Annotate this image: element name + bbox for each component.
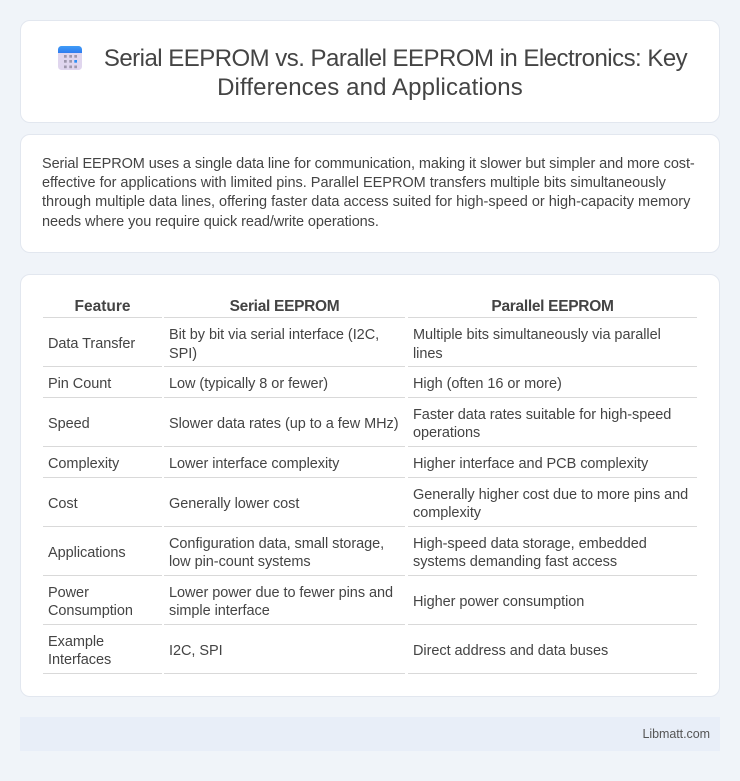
title: Differences and Applications xyxy=(217,74,523,101)
summary text: through multiple data lines, offering faster data access suited for high-speed or high-capacity memory xyxy=(42,194,690,210)
comparison table: lines xyxy=(413,346,443,362)
comparison table: Slower data rates (up to a few MHz) xyxy=(169,416,399,432)
comparison table: Generally higher cost due to more pins and xyxy=(413,487,688,503)
comparison table: Bit by bit via serial interface (I2C, xyxy=(169,327,379,343)
comparison table: Higher power consumption xyxy=(413,594,584,610)
title xyxy=(104,45,688,101)
footer credit: Libmatt.com xyxy=(642,727,710,741)
footer bar xyxy=(20,717,720,751)
comparison table: Low (typically 8 or fewer) xyxy=(169,376,328,392)
comparison table: Example xyxy=(48,634,104,650)
comparison table: Power xyxy=(48,585,89,601)
comparison table: Consumption xyxy=(48,603,133,619)
comparison table: Data Transfer xyxy=(48,336,135,352)
comparison table: Generally lower cost xyxy=(169,496,299,512)
summary text: Serial EEPROM uses a single data line for communication, making it slower but simpler and more cost- xyxy=(42,156,695,172)
comparison table: systems demanding fast access xyxy=(413,554,617,570)
comparison table: operations xyxy=(413,425,480,441)
comparison table: low pin-count systems xyxy=(169,554,311,570)
summary text: effective for applications with limited pins. Parallel EEPROM transfers multiple bits simultaneously xyxy=(42,175,666,191)
title: Serial EEPROM vs. Parallel EEPROM in Electronics: Key xyxy=(104,45,687,72)
panel: summary card xyxy=(20,134,720,253)
panel: title card xyxy=(20,20,720,123)
comparison table: complexity xyxy=(413,505,481,521)
comparison table: Pin Count xyxy=(48,376,111,392)
icon: calendar grid xyxy=(58,46,82,70)
comparison table: Multiple bits simultaneously via parallel xyxy=(413,327,661,343)
comparison table: Cost xyxy=(48,496,78,512)
comparison table: Complexity xyxy=(48,456,119,472)
comparison table: High (often 16 or more) xyxy=(413,376,562,392)
comparison table: I2C, SPI xyxy=(169,643,223,659)
comparison table: simple interface xyxy=(169,603,270,619)
comparison table: Parallel EEPROM xyxy=(491,298,614,315)
comparison table: Configuration data, small storage, xyxy=(169,536,384,552)
panel: comparison table card xyxy=(20,274,720,697)
comparison table: Speed xyxy=(48,416,90,432)
comparison table: High-speed data storage, embedded xyxy=(413,536,647,552)
comparison table: Higher interface and PCB complexity xyxy=(413,456,648,472)
comparison table: Interfaces xyxy=(48,652,111,668)
comparison table: Feature xyxy=(74,298,130,315)
comparison table: Applications xyxy=(48,545,126,561)
comparison table: Serial EEPROM xyxy=(230,298,339,315)
summary text: needs where you require quick read/write operations. xyxy=(42,214,379,230)
comparison table: SPI) xyxy=(169,346,197,362)
comparison table: Lower power due to fewer pins and xyxy=(169,585,393,601)
comparison table: Direct address and data buses xyxy=(413,643,608,659)
comparison table: Faster data rates suitable for high-speed xyxy=(413,407,671,423)
comparison table: Lower interface complexity xyxy=(169,456,339,472)
summary text xyxy=(42,156,695,230)
